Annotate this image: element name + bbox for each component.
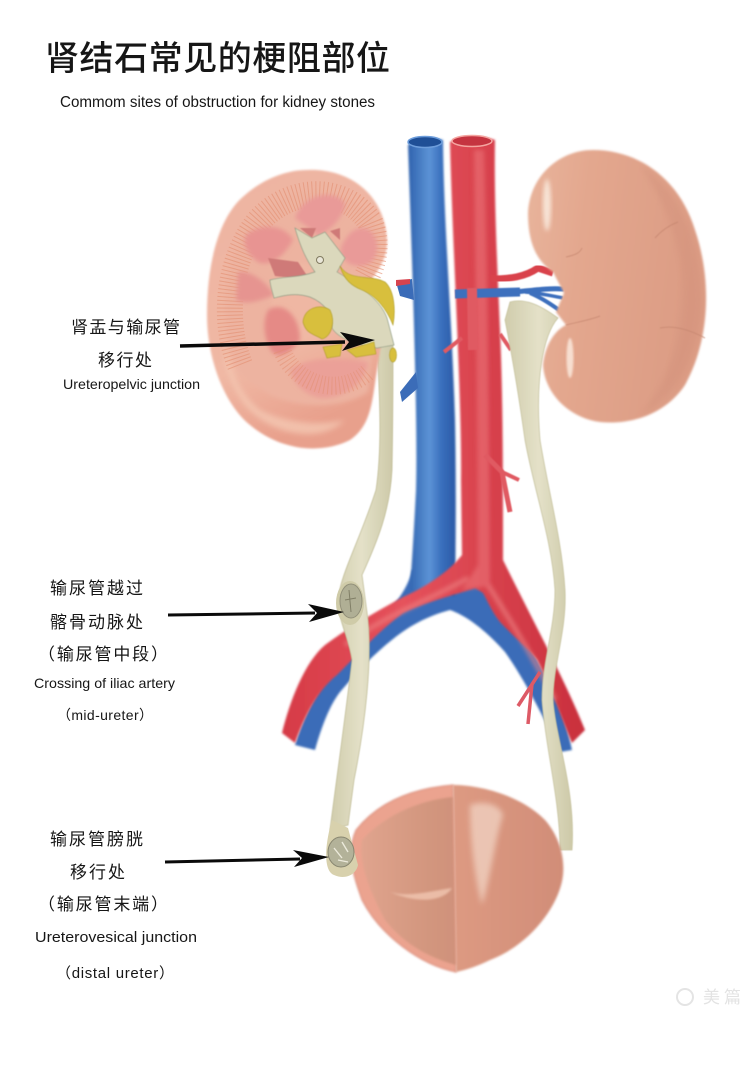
label: ureterovesical junction bbox=[35, 830, 197, 982]
aorta and iliac arteries bbox=[282, 137, 585, 743]
watermark bbox=[677, 988, 741, 1007]
arrow: ureteropelvic junction bbox=[180, 332, 375, 351]
anatomy illustration bbox=[282, 136, 585, 850]
perirenal fat bbox=[303, 266, 396, 362]
cortex base bbox=[225, 191, 379, 405]
label: crossing of iliac artery: （mid-ureter） bbox=[57, 707, 153, 723]
medulla pyramids bbox=[236, 195, 377, 398]
aorta opening bbox=[452, 136, 492, 146]
renal artery bbox=[490, 268, 553, 279]
title: 肾结石常见的梗阻部位 bbox=[45, 40, 390, 78]
interior fold bbox=[390, 888, 452, 900]
vena cava opening bbox=[408, 136, 442, 148]
label: crossing of iliac artery: （输尿管中段） bbox=[38, 645, 168, 664]
label: ureterovesical junction: （distal ureter） bbox=[56, 965, 174, 982]
panel: sectioned right kidney bbox=[207, 170, 396, 448]
panel: outer left kidney bbox=[528, 150, 706, 423]
outer half bbox=[453, 785, 563, 972]
label: crossing of iliac artery: 输尿管越过 bbox=[50, 579, 143, 598]
calyx recesses bbox=[268, 228, 340, 280]
striation overlay on lower lobe bbox=[282, 350, 368, 386]
capsule bbox=[207, 170, 387, 448]
stone: mid-ureter bbox=[336, 581, 364, 625]
renal vein branches bbox=[455, 289, 564, 312]
label: ureterovesical junction: （输尿管末端） bbox=[38, 895, 168, 914]
label: ureteropelvic junction: 移行处 bbox=[98, 351, 152, 370]
iliac veins bbox=[295, 565, 572, 752]
label: ureteropelvic junction bbox=[63, 318, 200, 392]
cortex striations bbox=[230, 194, 375, 365]
renal sinus and pelvis bbox=[270, 228, 394, 348]
lower lumbar vein bbox=[400, 372, 418, 402]
arrow: ureterovesical junction bbox=[165, 850, 329, 867]
right renal artery tip bbox=[396, 279, 410, 286]
bladder interior bbox=[361, 797, 456, 965]
capsule highlight bbox=[224, 340, 345, 434]
label: ureterovesical junction: Ureterovesical junction bbox=[35, 929, 197, 946]
arrow: iliac crossing bbox=[168, 604, 344, 622]
gonadal and lumbar arteries bbox=[444, 288, 519, 512]
label: ureteropelvic junction: 肾盂与输尿管 bbox=[71, 318, 180, 337]
surface creases bbox=[566, 222, 705, 338]
label: crossing of iliac artery: 髂骨动脉处 bbox=[50, 613, 143, 632]
label: crossing of iliac artery: Crossing of iliac artery bbox=[34, 675, 175, 691]
label: ureterovesical junction: 移行处 bbox=[70, 863, 125, 882]
sectioned wall bbox=[351, 785, 456, 972]
aorta highlight bbox=[462, 150, 490, 590]
right renal vein stub bbox=[396, 279, 414, 300]
kidney shading bbox=[640, 165, 702, 415]
iliac artery highlight bbox=[345, 578, 555, 700]
iliac artery branch bbox=[518, 672, 540, 724]
left ureter bbox=[330, 345, 393, 830]
stone: distal ureter bbox=[326, 820, 358, 877]
label: crossing of iliac artery bbox=[34, 579, 175, 723]
outer highlight bbox=[470, 803, 503, 905]
subtitle: Commom sites of obstruction for kidney stones bbox=[60, 94, 375, 111]
right ureter bbox=[505, 301, 573, 850]
label: ureterovesical junction: 输尿管膀胱 bbox=[50, 830, 143, 849]
renal papilla bbox=[316, 256, 324, 264]
panel: urinary bladder bbox=[351, 785, 563, 972]
highlight upper bbox=[543, 179, 551, 231]
highlight lower bbox=[566, 338, 574, 378]
label: ureteropelvic junction: Ureteropelvic junction bbox=[63, 376, 200, 392]
vena cava bbox=[408, 138, 456, 596]
watermark: 美篇 bbox=[703, 988, 741, 1007]
